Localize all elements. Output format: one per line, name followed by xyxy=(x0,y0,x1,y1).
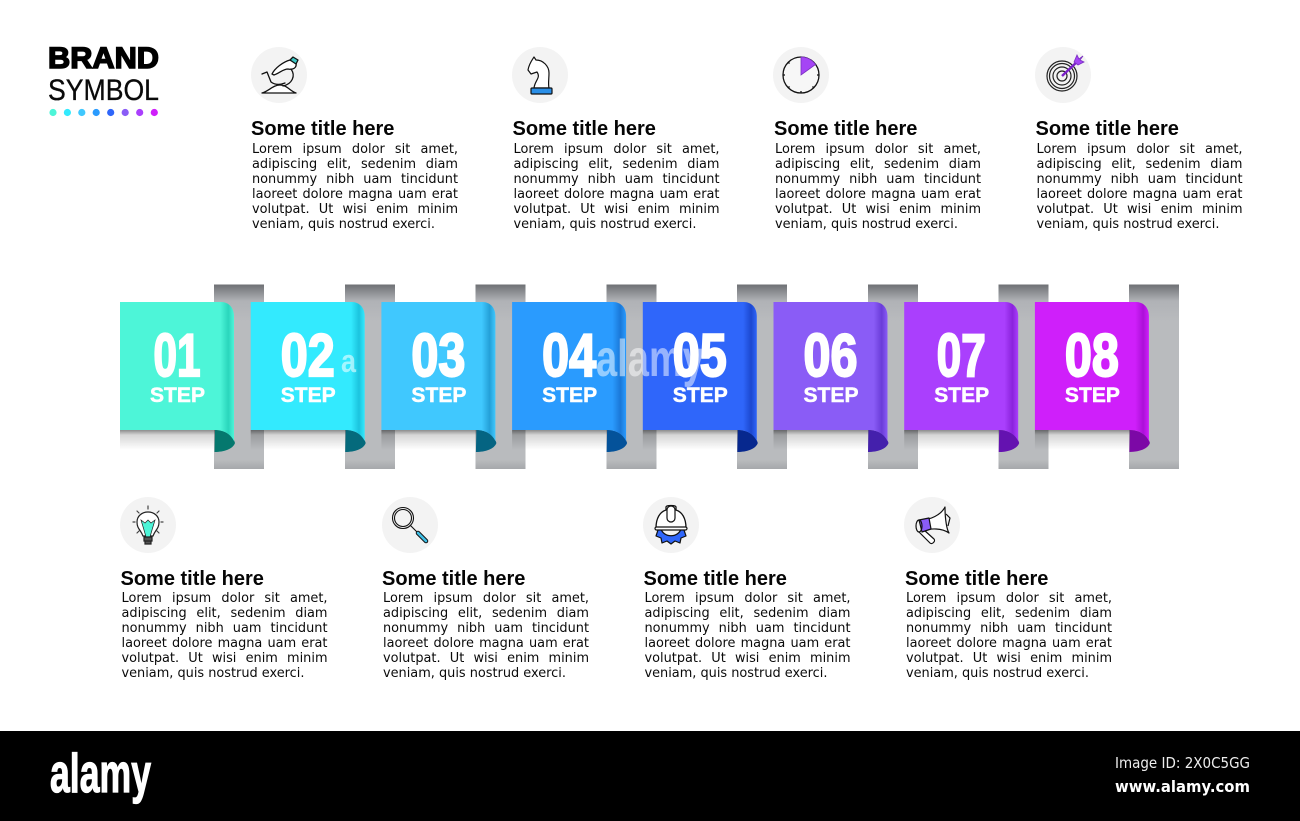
footer url: www.alamy.com xyxy=(1115,777,1250,796)
step 06 ribbon: 06 xyxy=(804,322,858,389)
title: Some title here xyxy=(512,118,656,140)
body: nonummy nibh uam tincidunt xyxy=(252,172,458,186)
icon: magnifier xyxy=(382,497,438,553)
step 05 ribbon: 05 xyxy=(673,322,727,389)
title: Some title here xyxy=(120,568,264,590)
title: Some title here xyxy=(1036,118,1179,140)
body: adipiscing elit, sedenim diam xyxy=(252,156,458,172)
watermark: letter a: a xyxy=(341,343,356,379)
body: nonummy nibh uam tincidunt xyxy=(775,172,981,186)
body xyxy=(383,591,589,681)
step 06 ribbon xyxy=(774,302,888,452)
footer logo: alamy: alamy xyxy=(50,742,151,804)
body: volutpat. Ut wisi enim minim xyxy=(644,651,850,666)
step 05 ribbon xyxy=(643,302,758,452)
text block: bottom 2 xyxy=(382,568,589,681)
step 04 ribbon xyxy=(512,302,627,452)
watermark: alamy over ribbons: alamy xyxy=(596,330,704,388)
title: Some title here xyxy=(905,568,1048,590)
icon: helmet with gear xyxy=(643,497,699,553)
body: veniam, quis nostrud exerci. xyxy=(122,666,304,681)
body xyxy=(514,142,720,232)
icon: target with arrow xyxy=(1035,47,1091,103)
body: volutpat. Ut wisi enim minim xyxy=(1036,202,1242,216)
body: adipiscing elit, sedenim diam xyxy=(775,156,981,172)
text block: bottom 4 xyxy=(905,568,1112,681)
step 06 ribbon: STEP xyxy=(804,384,858,407)
step 08 ribbon xyxy=(1035,302,1150,452)
title: Some title here xyxy=(644,568,787,590)
body xyxy=(775,142,981,232)
body: veniam, quis nostrud exerci. xyxy=(644,666,827,681)
body: adipiscing elit, sedenim diam xyxy=(644,606,850,621)
body: volutpat. Ut wisi enim minim xyxy=(252,202,458,216)
logo word BRAND: BRAND xyxy=(48,42,159,75)
icon: chess knight xyxy=(512,47,568,103)
body: nonummy nibh uam tincidunt xyxy=(383,621,589,636)
step 07 ribbon xyxy=(904,302,1019,452)
icon: megaphone xyxy=(904,497,960,553)
step 04 ribbon: 04 xyxy=(542,322,597,389)
body: volutpat. Ut wisi enim minim xyxy=(906,651,1112,666)
body: nonummy nibh uam tincidunt xyxy=(514,172,720,186)
body: laoreet dolore magna uam erat xyxy=(775,186,981,202)
step 02 ribbon xyxy=(251,302,366,452)
logo word SYMBOL: SYMBOL xyxy=(48,74,159,107)
step 07 ribbon: STEP xyxy=(934,384,989,407)
step 04 ribbon: STEP xyxy=(542,384,597,407)
text block: top 3 xyxy=(774,118,981,232)
body: nonummy nibh uam tincidunt xyxy=(122,621,328,636)
text block: top 2 xyxy=(512,118,720,232)
body: nonummy nibh uam tincidunt xyxy=(1036,172,1242,186)
step 08 ribbon: STEP xyxy=(1065,384,1120,407)
logo: brand symbol xyxy=(48,42,159,116)
step 05 ribbon: STEP xyxy=(673,384,728,407)
body: adipiscing elit, sedenim diam xyxy=(1036,156,1242,172)
body: laoreet dolore magna uam erat xyxy=(122,636,328,651)
text block: bottom 1 xyxy=(120,568,328,681)
body: laoreet dolore magna uam erat xyxy=(514,186,720,202)
step 01 ribbon: STEP xyxy=(150,384,205,407)
text block: top 1 xyxy=(251,118,458,232)
body xyxy=(122,591,328,681)
step 02 ribbon: STEP xyxy=(281,384,336,407)
body: laoreet dolore magna uam erat xyxy=(383,636,589,651)
step 02 ribbon: 02 xyxy=(281,322,335,389)
body xyxy=(1036,142,1242,232)
step 03 ribbon: STEP xyxy=(411,384,466,407)
step 03 ribbon xyxy=(381,302,496,452)
body xyxy=(644,591,850,681)
body: adipiscing elit, sedenim diam xyxy=(122,606,328,621)
step 07 ribbon: 07 xyxy=(937,322,986,389)
body: adipiscing elit, sedenim diam xyxy=(383,606,589,621)
icon: microscope xyxy=(251,47,307,103)
body: Lorem ipsum dolor sit amet, xyxy=(122,591,328,606)
body: Lorem ipsum dolor sit amet, xyxy=(644,591,850,606)
body: Lorem ipsum dolor sit amet, xyxy=(906,591,1112,606)
body: volutpat. Ut wisi enim minim xyxy=(383,651,589,666)
step 01 ribbon xyxy=(120,302,235,452)
footer image id: Image ID: 2X0C5GG xyxy=(1115,754,1250,772)
text block: bottom 3 xyxy=(644,568,850,681)
step 01 ribbon: 01 xyxy=(154,322,200,389)
body: veniam, quis nostrud exerci. xyxy=(1036,216,1219,232)
footer bar xyxy=(0,731,1300,821)
body xyxy=(252,142,458,232)
body: laoreet dolore magna uam erat xyxy=(906,636,1112,651)
grey vertical bars behind ribbons xyxy=(214,284,1179,469)
body: laoreet dolore magna uam erat xyxy=(1036,186,1242,202)
body: volutpat. Ut wisi enim minim xyxy=(122,651,328,666)
body: veniam, quis nostrud exerci. xyxy=(906,666,1089,681)
body: nonummy nibh uam tincidunt xyxy=(906,621,1112,636)
logo colour dots xyxy=(49,109,158,116)
text block: top 4 xyxy=(1036,118,1242,232)
title: Some title here xyxy=(251,118,394,140)
icon: clock xyxy=(773,47,829,103)
body: veniam, quis nostrud exerci. xyxy=(514,216,696,232)
body: volutpat. Ut wisi enim minim xyxy=(514,202,720,216)
body: Lorem ipsum dolor sit amet, xyxy=(383,591,589,606)
title: Some title here xyxy=(382,568,525,590)
body: volutpat. Ut wisi enim minim xyxy=(775,202,981,216)
body: veniam, quis nostrud exerci. xyxy=(383,666,566,681)
body: laoreet dolore magna uam erat xyxy=(252,186,458,202)
step 08 ribbon: 08 xyxy=(1065,322,1119,389)
body: adipiscing elit, sedenim diam xyxy=(906,606,1112,621)
body: veniam, quis nostrud exerci. xyxy=(252,216,435,232)
body: Lorem ipsum dolor sit amet, xyxy=(1036,142,1242,156)
body: veniam, quis nostrud exerci. xyxy=(775,216,958,232)
body xyxy=(906,591,1112,681)
body: Lorem ipsum dolor sit amet, xyxy=(252,142,458,156)
body: laoreet dolore magna uam erat xyxy=(644,636,850,651)
body: adipiscing elit, sedenim diam xyxy=(514,156,720,172)
title: Some title here xyxy=(774,118,917,140)
step 03 ribbon: 03 xyxy=(411,322,465,389)
body: Lorem ipsum dolor sit amet, xyxy=(775,142,981,156)
body: Lorem ipsum dolor sit amet, xyxy=(514,142,720,156)
body: nonummy nibh uam tincidunt xyxy=(644,621,850,636)
icon: light bulb xyxy=(120,497,176,553)
